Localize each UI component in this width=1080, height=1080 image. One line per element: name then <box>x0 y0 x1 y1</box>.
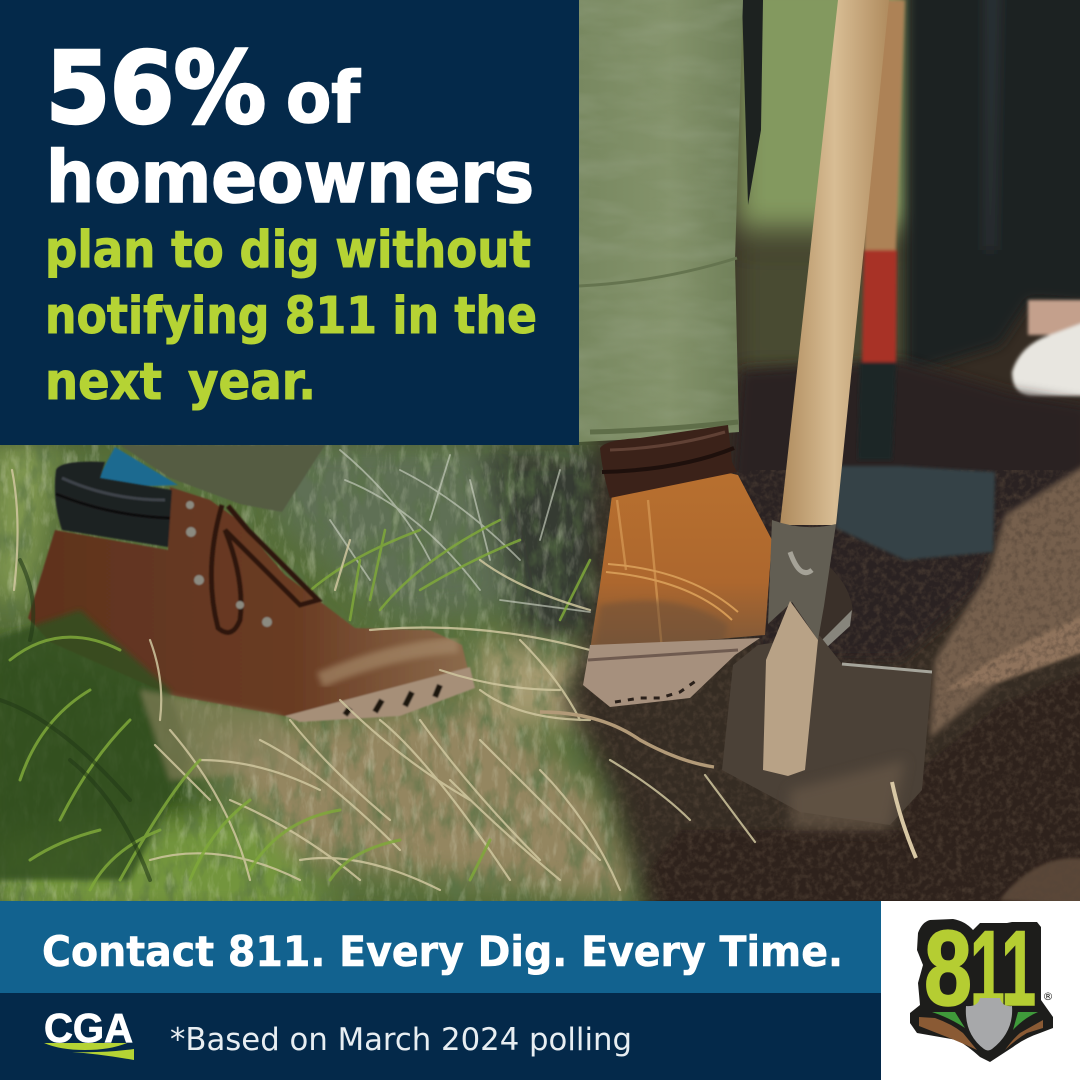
subheading: plan to dig: next <box>45 353 162 412</box>
background person's dark trousers <box>905 0 1080 375</box>
front boot <box>28 462 475 722</box>
rear boot <box>583 425 853 707</box>
dark soil background <box>730 360 1080 660</box>
grass overlapping boot <box>0 610 300 880</box>
heading: 56% of homeowners <box>46 32 534 219</box>
grass field <box>0 430 680 920</box>
subheading: plan to dig: notifying 811 in the <box>45 287 537 346</box>
icon: shovel <box>966 998 1012 1050</box>
shovel socket <box>768 520 836 640</box>
footnote: *Based on March 2024 polling <box>170 1022 632 1058</box>
footer bar <box>0 993 881 1080</box>
logo: 811 numerals <box>924 908 1036 1028</box>
logo: CGA: CGA <box>44 1005 133 1051</box>
soil texture <box>480 470 1080 900</box>
subheading: plan to dig <box>45 221 537 412</box>
front grass blades <box>0 470 755 890</box>
panel: 811 logo <box>881 901 1080 1080</box>
banner: call to action <box>0 901 881 993</box>
tangled roots <box>540 712 714 767</box>
background person's white shoe <box>1012 300 1080 396</box>
right trouser leg <box>579 0 763 445</box>
subheading: plan to dig: year. <box>188 353 316 412</box>
registered mark: ® <box>1042 990 1054 1003</box>
back grass blades <box>300 450 590 620</box>
logo: black badge outline <box>910 919 1053 1062</box>
lighter soil bank <box>930 462 1080 738</box>
logo: 811 numerals: 8 <box>924 908 972 1028</box>
heading: 56% of homeowners: of <box>286 57 361 139</box>
root in soil <box>892 782 916 858</box>
panel: headline <box>0 0 579 445</box>
banner: call to action: Contact 811. Every Dig. Every Time. <box>42 927 843 976</box>
dark foreground soil <box>620 612 1080 910</box>
subheading: plan to dig: plan to dig without <box>45 221 531 280</box>
background shovel <box>836 0 995 560</box>
shovel blade <box>722 636 932 825</box>
blurred green background <box>735 0 925 375</box>
foreground shovel <box>722 0 932 858</box>
heading: 56% of homeowners: homeowners <box>46 136 534 219</box>
logo: 811 numerals: 11 <box>970 908 1036 1028</box>
left trouser leg and sock <box>98 445 325 512</box>
shovel handle <box>780 0 889 525</box>
heading: 56% of homeowners: 56% <box>46 32 266 146</box>
lower handle <box>763 601 818 776</box>
icon: soil and grass <box>919 1012 1043 1050</box>
